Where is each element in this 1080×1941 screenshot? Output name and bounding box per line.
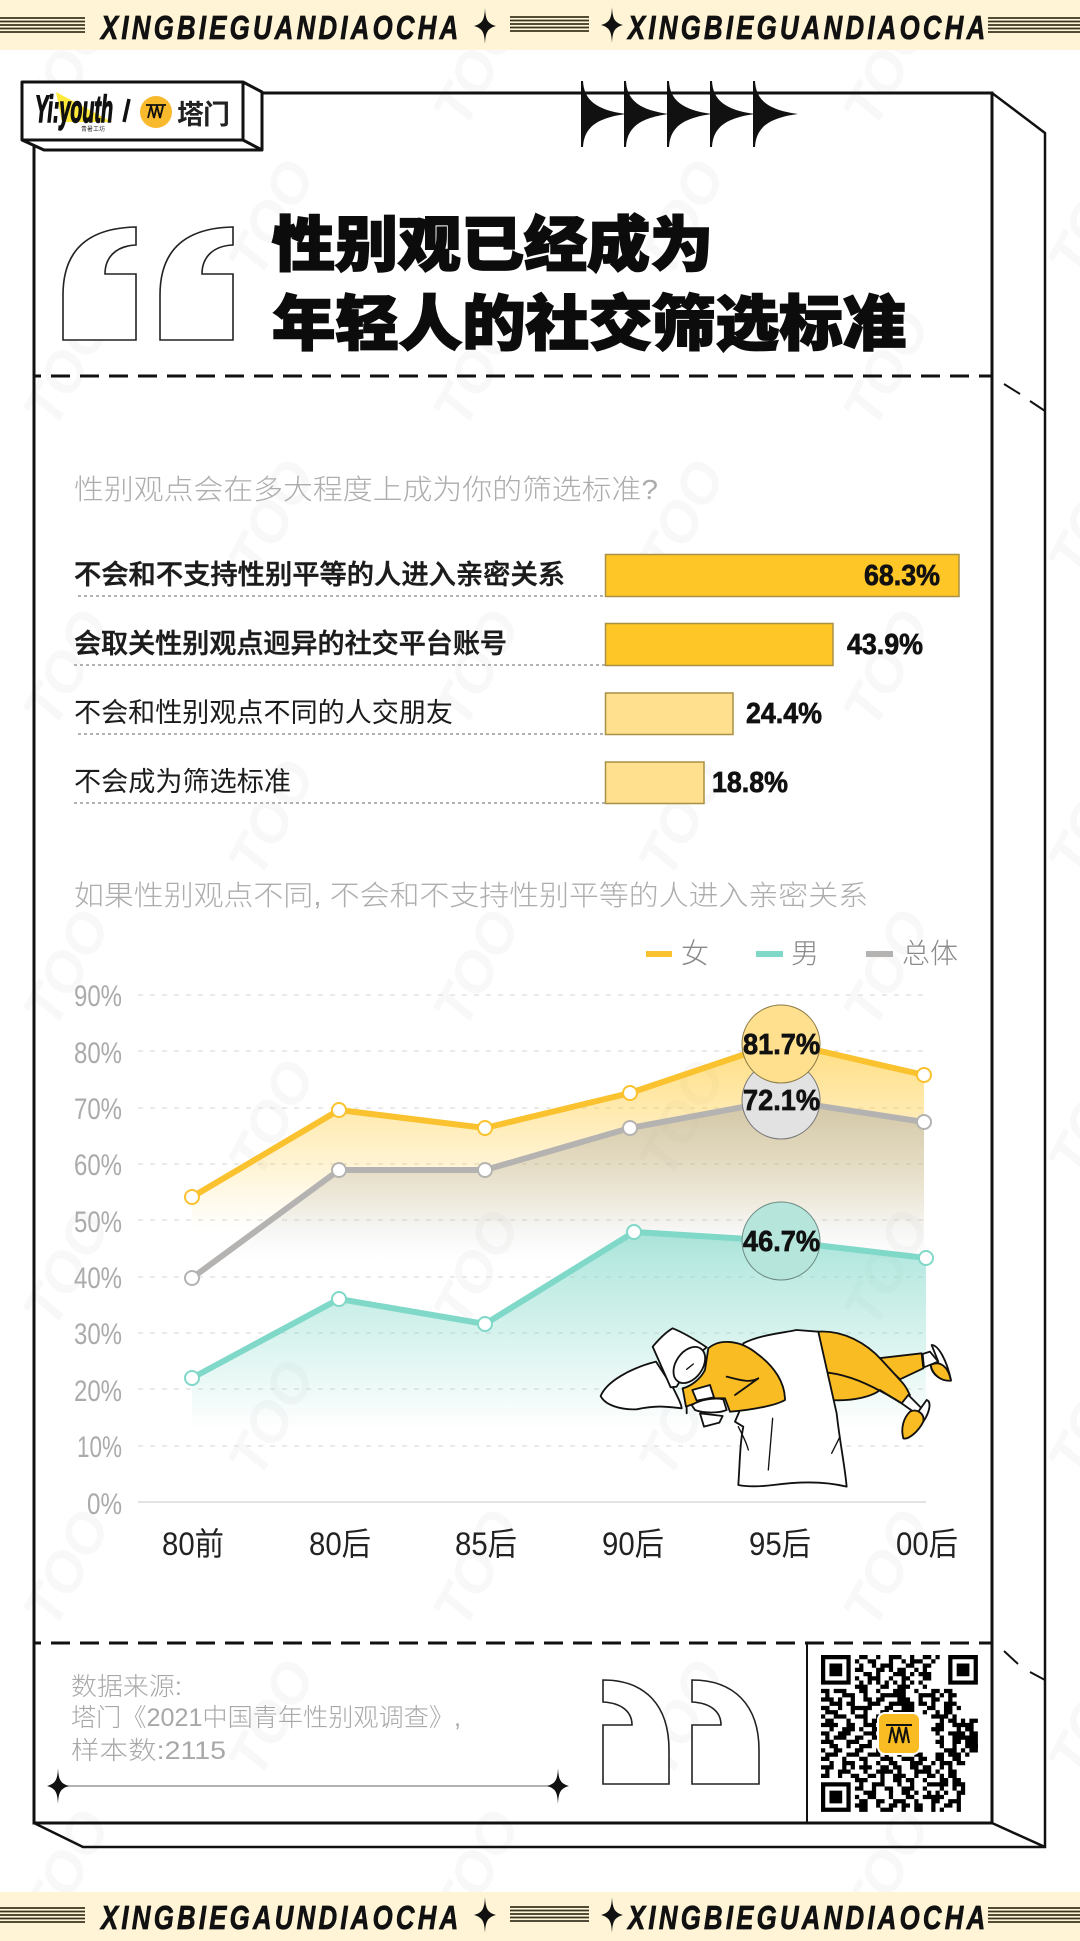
row 1: 不会和不支持性别平等的人进入亲密关系: [74, 560, 565, 590]
logo: Yi:youth: [35, 89, 113, 133]
hand: [692, 1399, 727, 1412]
x axis labels: [162, 1526, 958, 1562]
closing quote mark: [603, 1680, 759, 1784]
source note: 数据来源:: [71, 1673, 182, 1701]
hips and thigh: [818, 1332, 910, 1403]
slash: [124, 99, 129, 122]
earphone cord: [684, 1407, 689, 1413]
y axis labels: 0%: [87, 1488, 122, 1521]
row 4: 不会成为筛选标准: [74, 767, 291, 797]
top banner: XINGBIEGUANDIAOCHA: [626, 10, 985, 47]
area: total: [192, 1100, 924, 1300]
source note: 塔门《2021中国青年性别观调查》,: [71, 1704, 461, 1732]
logo: Yi:youth: 青暑工坊: [81, 125, 105, 133]
y axis labels: 70%: [74, 1093, 122, 1126]
row 4: 18.8%: [712, 767, 788, 799]
y axis labels: 60%: [74, 1149, 122, 1182]
source note: 样本数:2115: [71, 1737, 226, 1765]
y axis labels: 30%: [74, 1318, 122, 1351]
front sock and slipper: [902, 1395, 930, 1439]
title: [272, 212, 906, 358]
row 2: 会取关性别观点迥异的社交平台账号: [74, 629, 507, 659]
y axis labels: 80%: [74, 1037, 122, 1070]
legend: [646, 938, 958, 969]
y axis labels: [74, 980, 122, 1521]
y axis labels: 90%: [74, 980, 122, 1013]
top banner: [0, 0, 1080, 50]
legend: 女: [681, 938, 709, 969]
QR centre logo: [878, 1713, 920, 1754]
line chart: [74, 980, 958, 1562]
source note: [71, 1673, 461, 1765]
area: male: [192, 1232, 926, 1440]
y axis labels: 10%: [77, 1431, 122, 1464]
phone back: [700, 1413, 723, 1427]
callout: male 46.7%: [742, 1202, 820, 1280]
QR code: [821, 1657, 982, 1810]
row 2: [74, 624, 923, 666]
y axis labels: 20%: [74, 1375, 122, 1408]
x axis labels: 95后: [749, 1526, 811, 1562]
hood: [653, 1328, 707, 1387]
torso and sleeve: [683, 1342, 785, 1412]
callout: total 72.1%: [742, 1061, 820, 1139]
logo: Yi:youth: Yi:youth: [35, 89, 113, 131]
x axis labels: 00后: [896, 1526, 958, 1562]
bottom banner: XINGBIEGUANDIAOCHA: [626, 1900, 985, 1937]
legend: 总体: [902, 938, 958, 969]
pillow: [601, 1362, 682, 1409]
row 1: 68.3%: [864, 560, 940, 592]
y axis labels: 40%: [74, 1262, 122, 1295]
phone: [692, 1385, 714, 1401]
logo: tamen: [140, 96, 230, 130]
x axis labels: 80后: [309, 1526, 371, 1562]
opening quote mark: [63, 227, 233, 340]
x axis labels: 90后: [602, 1526, 664, 1562]
row 1: [74, 554, 959, 596]
x axis labels: 85后: [455, 1526, 517, 1562]
illustration: person lying on pillow with phone: [601, 1328, 951, 1487]
y axis labels: 50%: [74, 1206, 122, 1239]
bottom banner: XINGBIEGAUNDIAOCHA: [99, 1900, 458, 1937]
row 2: 43.9%: [847, 629, 923, 661]
footer rule with stars: [47, 1768, 569, 1804]
line: female: [185, 1042, 931, 1204]
bar chart: [74, 554, 959, 804]
logo plate: [22, 82, 262, 150]
title: 性别观已经成为: [272, 212, 713, 279]
face: [667, 1341, 712, 1389]
bottom banner: [0, 1892, 1080, 1941]
callout: total 72.1%: 72.1%: [743, 1085, 820, 1117]
callout: female 81.7%: 81.7%: [743, 1029, 820, 1061]
top banner: XINGBIEGUANDIAOCHA: [99, 10, 458, 47]
blanket: [735, 1330, 847, 1487]
logo: tamen: 塔门: [177, 100, 230, 130]
row 3: [74, 693, 822, 734]
line: male: [185, 1225, 933, 1385]
row 4: [74, 762, 788, 804]
back leg and slipper: [878, 1345, 951, 1381]
question heading 1: 性别观点会在多大程度上成为你的筛选标准?: [74, 474, 658, 505]
question heading 2: 如果性别观点不同, 不会和不支持性别平等的人进入亲密关系: [74, 880, 868, 911]
row 3: 24.4%: [746, 698, 822, 730]
row 3: 不会和性别观点不同的人交朋友: [74, 698, 453, 728]
callout: male 46.7%: 46.7%: [743, 1226, 820, 1258]
legend: 男: [791, 938, 819, 969]
area: female: [192, 1042, 924, 1300]
x axis labels: 80前: [162, 1526, 224, 1562]
title: 年轻人的社交筛选标准: [272, 291, 906, 358]
line: total: [185, 1100, 931, 1285]
callout: female 81.7%: [742, 1005, 820, 1083]
arrow decoration: [581, 81, 798, 147]
